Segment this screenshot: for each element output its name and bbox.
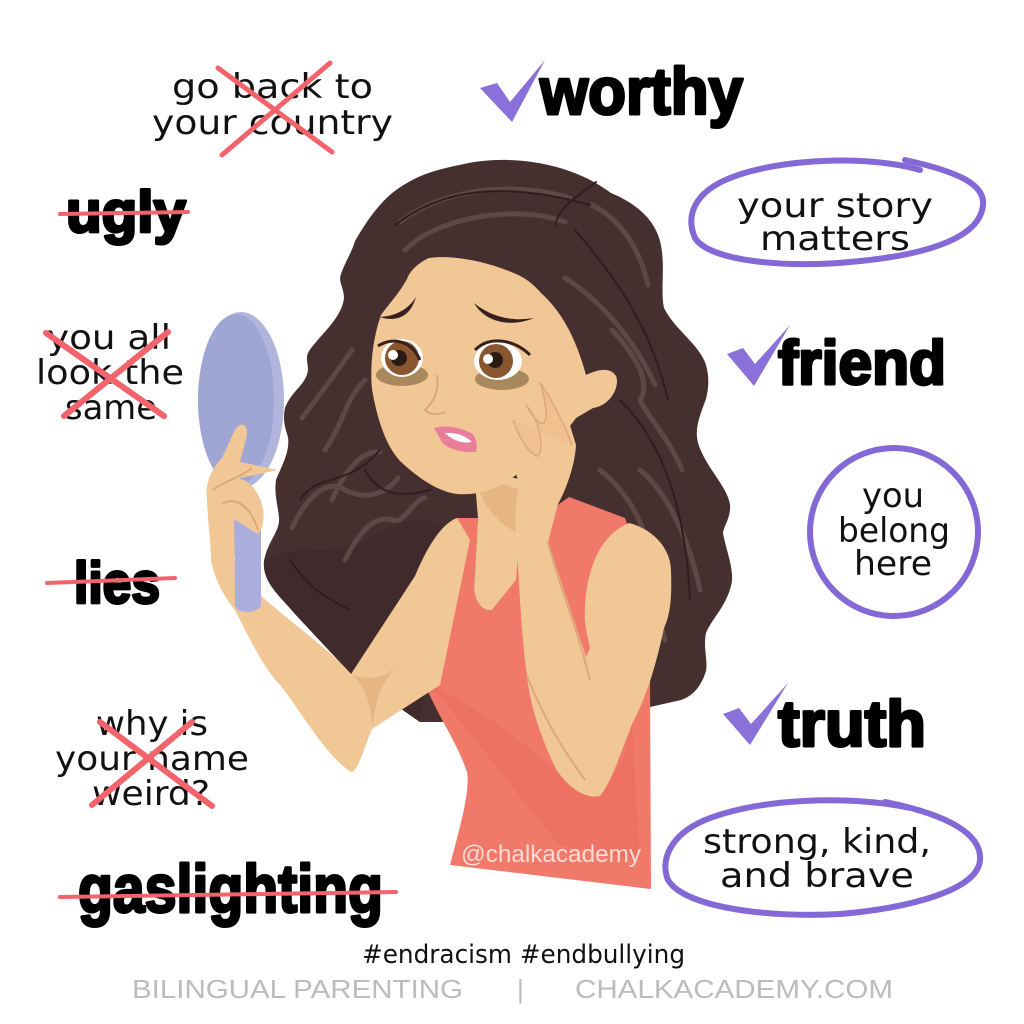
crossed out: gaslighting: gaslighting: [78, 851, 383, 927]
circled: strong, kind, and brave: strong, kind,: [703, 822, 931, 862]
circled: your story matters: matters: [760, 219, 910, 259]
circled: you belong here: here: [854, 544, 932, 584]
footer: |: [517, 974, 524, 1004]
face: [371, 257, 617, 494]
eyebrows: [380, 297, 534, 323]
footer: CHALKACADEMY.COM: [575, 974, 893, 1004]
circled: you belong here: belong: [838, 511, 950, 551]
check: truth: truth: [778, 687, 926, 760]
lower darker hair: [264, 520, 446, 722]
crossed out: why is your name weird?: weird?: [92, 774, 210, 814]
crossed out: you all look the same: [36, 318, 184, 428]
crossed out: go back to your country: [152, 63, 393, 155]
circled: you belong here: [810, 448, 978, 616]
circled: strong, kind, and brave: and brave: [720, 856, 914, 896]
crossed out: why is your name weird?: why is: [96, 704, 208, 744]
dress: [415, 497, 651, 889]
check: friend: friend: [778, 329, 946, 398]
curled fingers: [207, 479, 264, 534]
crossed out: you all look the same: same: [65, 388, 157, 428]
crossed out: go back to your country: your country: [152, 103, 393, 143]
crossed out: ugly: ugly: [66, 180, 186, 245]
circled: you belong here: you: [862, 476, 924, 516]
crossed out: why is your name weird?: your name: [55, 739, 249, 779]
hair: [264, 160, 732, 722]
circled: strong, kind, and brave: [665, 800, 980, 915]
crossed out: you all look the same: you all: [47, 318, 171, 358]
footer: BILINGUAL PARENTING: [132, 974, 463, 1004]
circled: your story matters: [691, 160, 983, 264]
left arm and hand: [207, 425, 470, 772]
watermark: @chalkacademy: [461, 841, 641, 868]
mouth: [434, 426, 477, 452]
hair strands: [292, 189, 700, 640]
crossed out: why is your name weird?: [55, 704, 249, 814]
mirror handle: [234, 500, 261, 612]
left eye: [376, 364, 428, 386]
crossed out: lies: lies: [74, 551, 160, 616]
crossed out: you all look the same: look the: [36, 353, 184, 393]
check: worthy: worthy: [539, 54, 743, 128]
hashtags: #endracism #endbullying: [362, 940, 685, 970]
right arm and hand on cheek: [510, 380, 671, 797]
check: truth: [723, 683, 926, 760]
illustration: girl looking in a mirror: [198, 160, 732, 889]
nose: [425, 375, 445, 414]
crossed out: go back to your country: go back to: [172, 67, 373, 107]
fingers on cheek: [513, 382, 572, 456]
circled: your story matters: your story: [737, 186, 933, 226]
mirror: [198, 312, 284, 488]
footer: [132, 974, 893, 1004]
right eye: [475, 368, 529, 390]
neck and chest: [474, 470, 524, 610]
